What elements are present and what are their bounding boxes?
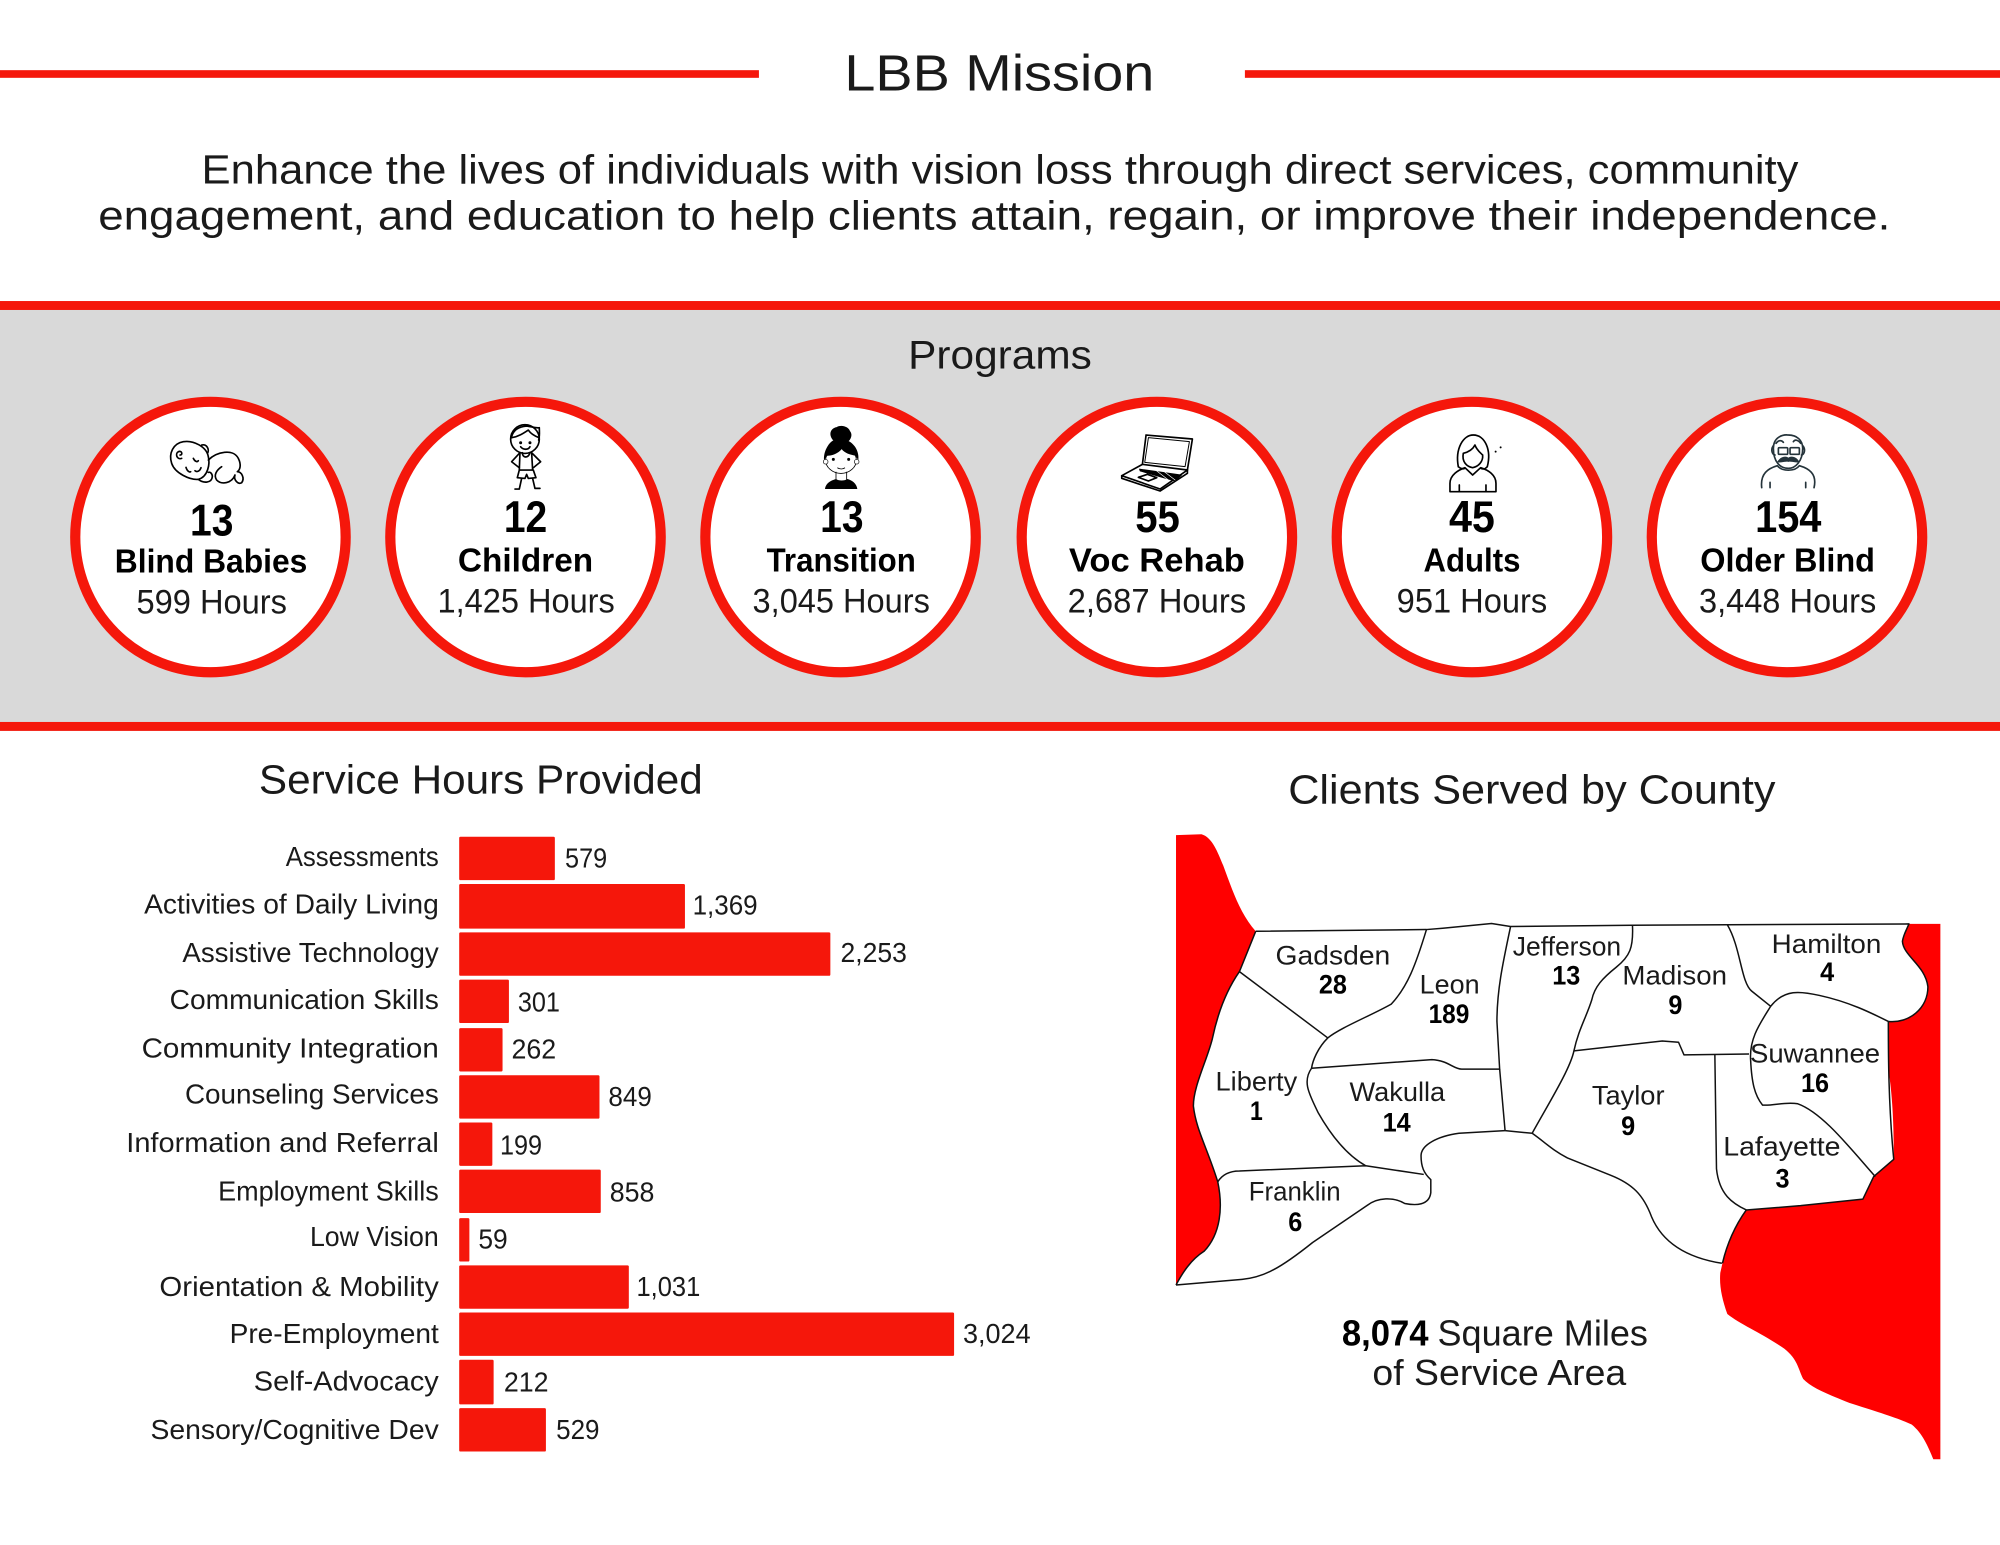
program: Blind Babies: Blind Babies bbox=[115, 544, 307, 581]
callout: service area: of Service Area bbox=[1372, 1353, 1626, 1393]
program: Adults bbox=[1337, 402, 1607, 672]
bar chart: Activities of Daily Living bbox=[144, 888, 439, 919]
bar chart: 199 bbox=[500, 1129, 542, 1160]
bar chart: Low Vision bbox=[310, 1221, 439, 1252]
county map: Liberty bbox=[1216, 1067, 1298, 1097]
county map: Hamilton bbox=[1772, 929, 1881, 959]
bar chart bbox=[126, 837, 1031, 1452]
mission statement: Enhance the lives of individuals with vision loss through direct services, community bbox=[202, 147, 1799, 193]
county map: 16 bbox=[1801, 1068, 1829, 1098]
county map: Madison bbox=[1622, 961, 1727, 991]
program: Adults: 951 Hours bbox=[1397, 582, 1547, 620]
programs heading: Programs bbox=[908, 334, 1092, 378]
program: Voc Rehab: Voc Rehab bbox=[1069, 542, 1245, 579]
program: Voc Rehab bbox=[1022, 402, 1292, 672]
county map: Lafayette bbox=[1723, 1132, 1841, 1162]
chart heading: Service Hours Provided bbox=[259, 756, 703, 802]
county map bbox=[1176, 834, 1940, 1459]
program: Transition: 3,045 Hours bbox=[753, 582, 930, 620]
bar chart: Orientation & Mobility bbox=[159, 1271, 439, 1302]
bar chart: 2,253 bbox=[841, 937, 907, 968]
program: Children: 1,425 Hours bbox=[438, 582, 615, 620]
county map: 14 bbox=[1383, 1107, 1411, 1137]
bar chart: Community Integration bbox=[142, 1032, 439, 1063]
county map: 9 bbox=[1621, 1111, 1635, 1141]
header: LBB Mission bbox=[0, 45, 2000, 102]
title: LBB Mission bbox=[844, 45, 1154, 102]
bar chart: Pre-Employment bbox=[230, 1318, 439, 1349]
program: Adults: Adults bbox=[1423, 542, 1520, 579]
bar chart: 858 bbox=[610, 1177, 654, 1208]
bar chart: Assessments bbox=[286, 841, 439, 872]
bar chart: Employment Skills bbox=[218, 1175, 439, 1206]
program: Blind Babies: 13 bbox=[190, 497, 233, 546]
panel: clients served by county bbox=[1176, 767, 1940, 1459]
county map: Suwannee bbox=[1750, 1039, 1880, 1069]
program: Voc Rehab: 2,687 Hours bbox=[1068, 582, 1246, 620]
icon: sleeping baby bbox=[171, 441, 243, 483]
program: Transition: 13 bbox=[820, 493, 864, 542]
program: Transition bbox=[705, 402, 976, 672]
county map: 28 bbox=[1319, 970, 1347, 1000]
program: Blind Babies bbox=[75, 402, 346, 672]
program: Older Blind: 154 bbox=[1755, 493, 1822, 542]
callout: service area: Square Miles bbox=[1438, 1314, 1648, 1354]
county map: 13 bbox=[1552, 961, 1580, 991]
icon: child bbox=[511, 425, 541, 489]
county map: Jefferson bbox=[1513, 931, 1621, 961]
icon: teen with hair bun bbox=[823, 426, 859, 489]
panel: programs bbox=[0, 301, 2000, 731]
icon: laptop bbox=[1122, 435, 1192, 491]
county map: 189 bbox=[1429, 999, 1469, 1029]
bar chart: 301 bbox=[518, 986, 560, 1017]
icon: woman bbox=[1450, 435, 1501, 492]
county map: Franklin bbox=[1249, 1176, 1341, 1206]
bar chart: 529 bbox=[556, 1414, 599, 1445]
bar chart: Counseling Services bbox=[185, 1078, 439, 1109]
county map: 1 bbox=[1250, 1096, 1263, 1126]
county map: Taylor bbox=[1592, 1081, 1665, 1111]
program: Older Blind: Older Blind bbox=[1700, 542, 1875, 579]
bar chart: 579 bbox=[565, 842, 607, 873]
callout: service area: 8,074 bbox=[1342, 1314, 1429, 1354]
callout: service area bbox=[1342, 1314, 1648, 1393]
county map: 4 bbox=[1820, 957, 1834, 987]
bar chart: 59 bbox=[478, 1224, 508, 1255]
bar chart: Communication Skills bbox=[170, 984, 439, 1015]
county map: Gadsden bbox=[1276, 940, 1390, 970]
program: Older Blind bbox=[1652, 402, 1922, 672]
program: Children: Children bbox=[458, 542, 593, 579]
county map: Leon bbox=[1420, 970, 1480, 1000]
bar chart: Information and Referral bbox=[126, 1127, 439, 1158]
county map: 3 bbox=[1776, 1164, 1790, 1194]
bar chart: 212 bbox=[504, 1367, 548, 1398]
county map: Wakulla bbox=[1349, 1077, 1445, 1107]
bar chart: 3,024 bbox=[963, 1318, 1031, 1349]
bar chart: Sensory/Cognitive Dev bbox=[151, 1414, 439, 1445]
icon: older man bbox=[1762, 435, 1815, 488]
bar chart: Assistive Technology bbox=[182, 937, 439, 968]
program: Children: 12 bbox=[504, 493, 547, 542]
program: Adults: 45 bbox=[1449, 493, 1495, 542]
program: Blind Babies: 599 Hours bbox=[136, 584, 287, 622]
program: Transition: Transition bbox=[767, 542, 916, 579]
bar chart: 1,369 bbox=[693, 890, 758, 921]
bar chart: 849 bbox=[608, 1081, 652, 1112]
county map: 6 bbox=[1288, 1207, 1302, 1237]
program: Children bbox=[390, 402, 661, 672]
map heading: Clients Served by County bbox=[1288, 767, 1776, 813]
bar chart: 262 bbox=[511, 1034, 556, 1065]
program: Older Blind: 3,448 Hours bbox=[1699, 582, 1876, 620]
bar chart: 1,031 bbox=[636, 1271, 700, 1302]
mission statement: engagement, and education to help clients attain, regain, or improve their independence. bbox=[98, 193, 1890, 239]
program: Voc Rehab: 55 bbox=[1135, 493, 1180, 542]
county map: 9 bbox=[1668, 990, 1682, 1020]
panel: service hours chart bbox=[126, 756, 1031, 1452]
bar chart: Self-Advocacy bbox=[254, 1365, 439, 1396]
mission statement bbox=[98, 147, 1890, 239]
